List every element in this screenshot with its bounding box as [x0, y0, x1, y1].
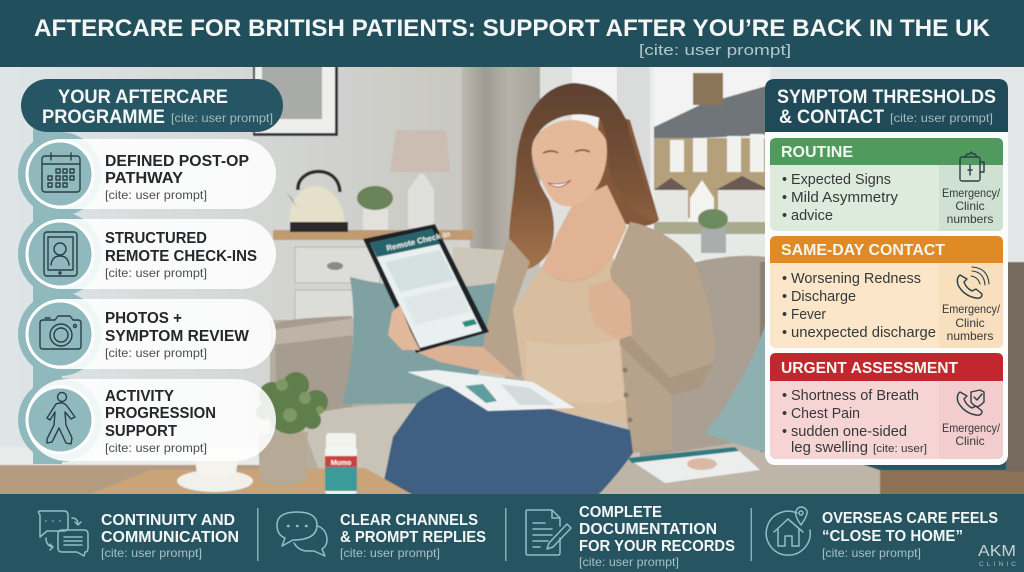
routine list: Expected Signs [791, 172, 891, 188]
eye and smile [543, 150, 590, 187]
left hand on tablet [388, 305, 420, 350]
item: defined post-op pathway: PATHWAY [105, 170, 184, 187]
header banner [0, 0, 1024, 67]
tablet: remote check-in: Remote Check-In [385, 229, 451, 253]
panel heading: & CONTACT [779, 107, 884, 128]
same-day list: Discharge [791, 289, 856, 305]
footer item: continuity and communication: [cite: user prompt] [101, 546, 202, 560]
icon: phone with shield [957, 390, 984, 415]
contact label [942, 186, 1001, 226]
routine list: • [782, 208, 787, 224]
shelf plant [357, 186, 393, 230]
logo: AKM Clinic [978, 543, 1016, 568]
urgent list: sudden one-sided [791, 424, 907, 440]
icon: ringing phone [957, 267, 989, 298]
footer item: overseas care feels close to home: OVERSEAS CARE FEELS [822, 510, 998, 527]
skirting and floor [0, 447, 300, 510]
icon: clipboard [960, 152, 984, 181]
same-day list: unexpected discharge [791, 325, 936, 341]
potted plant [256, 372, 328, 486]
routine list [782, 172, 899, 224]
footer item: continuity and communication [38, 511, 239, 560]
icon: exchanging chat bubbles [38, 511, 88, 556]
urgent list: • [782, 424, 787, 440]
brochure on sofa [627, 447, 760, 483]
routine list: Mild Asymmetry [791, 190, 899, 206]
lamp [390, 130, 450, 228]
same-day list: • [782, 271, 787, 287]
icon: speech bubbles [277, 512, 327, 556]
wall [0, 55, 550, 515]
footer band [0, 494, 1024, 572]
panel: your aftercare programme [18, 79, 283, 464]
item: structured remote check-ins [26, 219, 276, 289]
windowsill plant [698, 209, 728, 253]
urgent list [782, 388, 927, 456]
icon: walking person [47, 392, 75, 444]
wall strip above right sofa [770, 55, 1024, 267]
footer item: clear channels and prompt replies [277, 512, 486, 560]
tablet: remote check-in [363, 224, 489, 353]
camisole torso [510, 257, 627, 423]
contact label: numbers [947, 212, 993, 226]
shapewear band [525, 340, 624, 404]
routine list: • [782, 172, 787, 188]
routine list: • [782, 190, 787, 206]
footer item: overseas care feels close to home: “CLOSE TO HOME” [822, 528, 963, 545]
contact label [942, 302, 1001, 343]
item: photos + symptom review [26, 299, 276, 369]
icon: camera [40, 316, 81, 349]
footer item: complete documentation: FOR YOUR RECORDS [579, 538, 735, 555]
panel heading [765, 79, 1008, 132]
footer item: clear channels and prompt replies: [cite: user prompt] [340, 546, 440, 560]
item: structured remote check-ins: STRUCTURED [105, 230, 207, 247]
card: same-day contact: SAME-DAY CONTACT [781, 242, 945, 259]
contact label: Emergency/ [942, 186, 1001, 200]
panel heading: [cite: user prompt] [890, 111, 993, 125]
urgent list: • [782, 388, 787, 404]
contact label: numbers [947, 329, 993, 343]
item: defined post-op pathway: [cite: user prompt] [105, 188, 207, 202]
card: routine [770, 138, 1003, 231]
panel: symptom thresholds and contact [765, 79, 1008, 465]
framed picture [253, 55, 338, 136]
footer item: overseas care feels close to home: [cite: user prompt] [822, 546, 921, 560]
item: photos + symptom review: [cite: user prompt] [105, 346, 207, 360]
urgent list: Chest Pain [791, 406, 860, 422]
window [540, 55, 770, 267]
item: photos + symptom review: SYMPTOM REVIEW [105, 328, 249, 345]
card: urgent assessment: URGENT ASSESSMENT [781, 360, 958, 377]
booklet on lap [407, 370, 575, 411]
icon: home with location pin [766, 507, 810, 555]
supplement bottle: Mumo [331, 460, 351, 467]
card: routine: ROUTINE [781, 144, 853, 161]
footer item: clear channels and prompt replies: CLEAR CHANNELS [340, 512, 478, 529]
contact label: Emergency/ [942, 302, 1001, 316]
contact label: Emergency/ [942, 421, 1001, 435]
teal spine [18, 128, 102, 464]
curtain [462, 55, 540, 252]
footer item: complete documentation: COMPLETE [579, 504, 662, 521]
same-day list: • [782, 307, 787, 323]
panel heading: PROGRAMME [42, 107, 165, 128]
icon: tablet with person [44, 232, 77, 276]
jeans [378, 385, 633, 510]
same-day list: Fever [791, 307, 826, 323]
neck and chest [542, 185, 627, 281]
urgent list: [cite: user] [873, 443, 927, 455]
panel heading [21, 79, 283, 132]
item: activity progression support: SUPPORT [105, 423, 178, 440]
sofa [270, 247, 1024, 510]
routine list: advice [791, 208, 833, 224]
woman front hair [509, 83, 659, 270]
same-day list [782, 271, 936, 341]
item: activity progression support: PROGRESSION [105, 405, 216, 422]
item: structured remote check-ins: [cite: user prompt] [105, 266, 207, 280]
title citation: [cite: user prompt] [639, 42, 791, 59]
item: structured remote check-ins: REMOTE CHECK-INS [105, 248, 257, 265]
item: activity progression support: [cite: user prompt] [105, 441, 207, 455]
same-day list: • [782, 289, 787, 305]
footer item: continuity and communication: COMMUNICATION [101, 529, 239, 546]
houses [652, 73, 770, 236]
face [532, 120, 607, 206]
tea cup [177, 448, 253, 492]
card: same-day contact [770, 236, 1003, 348]
contact label [942, 421, 1001, 448]
contact label: Clinic [955, 434, 985, 448]
contact label: Clinic [955, 199, 985, 213]
card: urgent assessment [770, 353, 1003, 459]
panel heading: YOUR AFTERCARE [58, 87, 228, 108]
teal cushions [342, 277, 766, 452]
urgent list: • [782, 406, 787, 422]
same-day list: Worsening Redness [791, 271, 921, 287]
urgent list: leg swelling [791, 440, 868, 456]
footer item: overseas care feels close to home [766, 507, 998, 560]
urgent list: Shortness of Breath [791, 388, 919, 404]
coffee table [50, 468, 440, 510]
arm holding tablet [388, 305, 517, 378]
item: defined post-op pathway: DEFINED POST-OP [105, 153, 249, 170]
logo: AKM Clinic: CLINIC [979, 561, 1016, 568]
footer item: complete documentation [526, 504, 735, 569]
supplement bottle [325, 433, 357, 494]
footer item: continuity and communication: CONTINUITY AND [101, 512, 235, 529]
same-day list: • [782, 325, 787, 341]
contact label: Clinic [955, 316, 985, 330]
sideboard [273, 230, 473, 330]
item: activity progression support [26, 379, 276, 461]
icon: document and pen [526, 510, 571, 555]
item: activity progression support: ACTIVITY [105, 388, 175, 405]
footer item: complete documentation: DOCUMENTATION [579, 521, 717, 538]
logo: AKM Clinic: AKM [978, 543, 1016, 560]
woman back hair [590, 110, 659, 226]
footer item: complete documentation: [cite: user prompt] [579, 555, 679, 569]
item: photos + symptom review: PHOTOS + [105, 310, 182, 327]
panel heading: SYMPTOM THRESHOLDS [777, 87, 996, 108]
title: AFTERCARE FOR BRITISH PATIENTS: SUPPORT AFTER YOU’RE BACK IN THE UK [34, 15, 991, 42]
item: defined post-op pathway [26, 139, 276, 209]
cardigan [483, 222, 715, 453]
footer item: clear channels and prompt replies: & PROMPT REPLIES [340, 529, 486, 546]
kettle [286, 171, 348, 232]
icon: calendar [42, 153, 80, 192]
right hand [589, 280, 632, 340]
panel heading: [cite: user prompt] [171, 111, 273, 125]
